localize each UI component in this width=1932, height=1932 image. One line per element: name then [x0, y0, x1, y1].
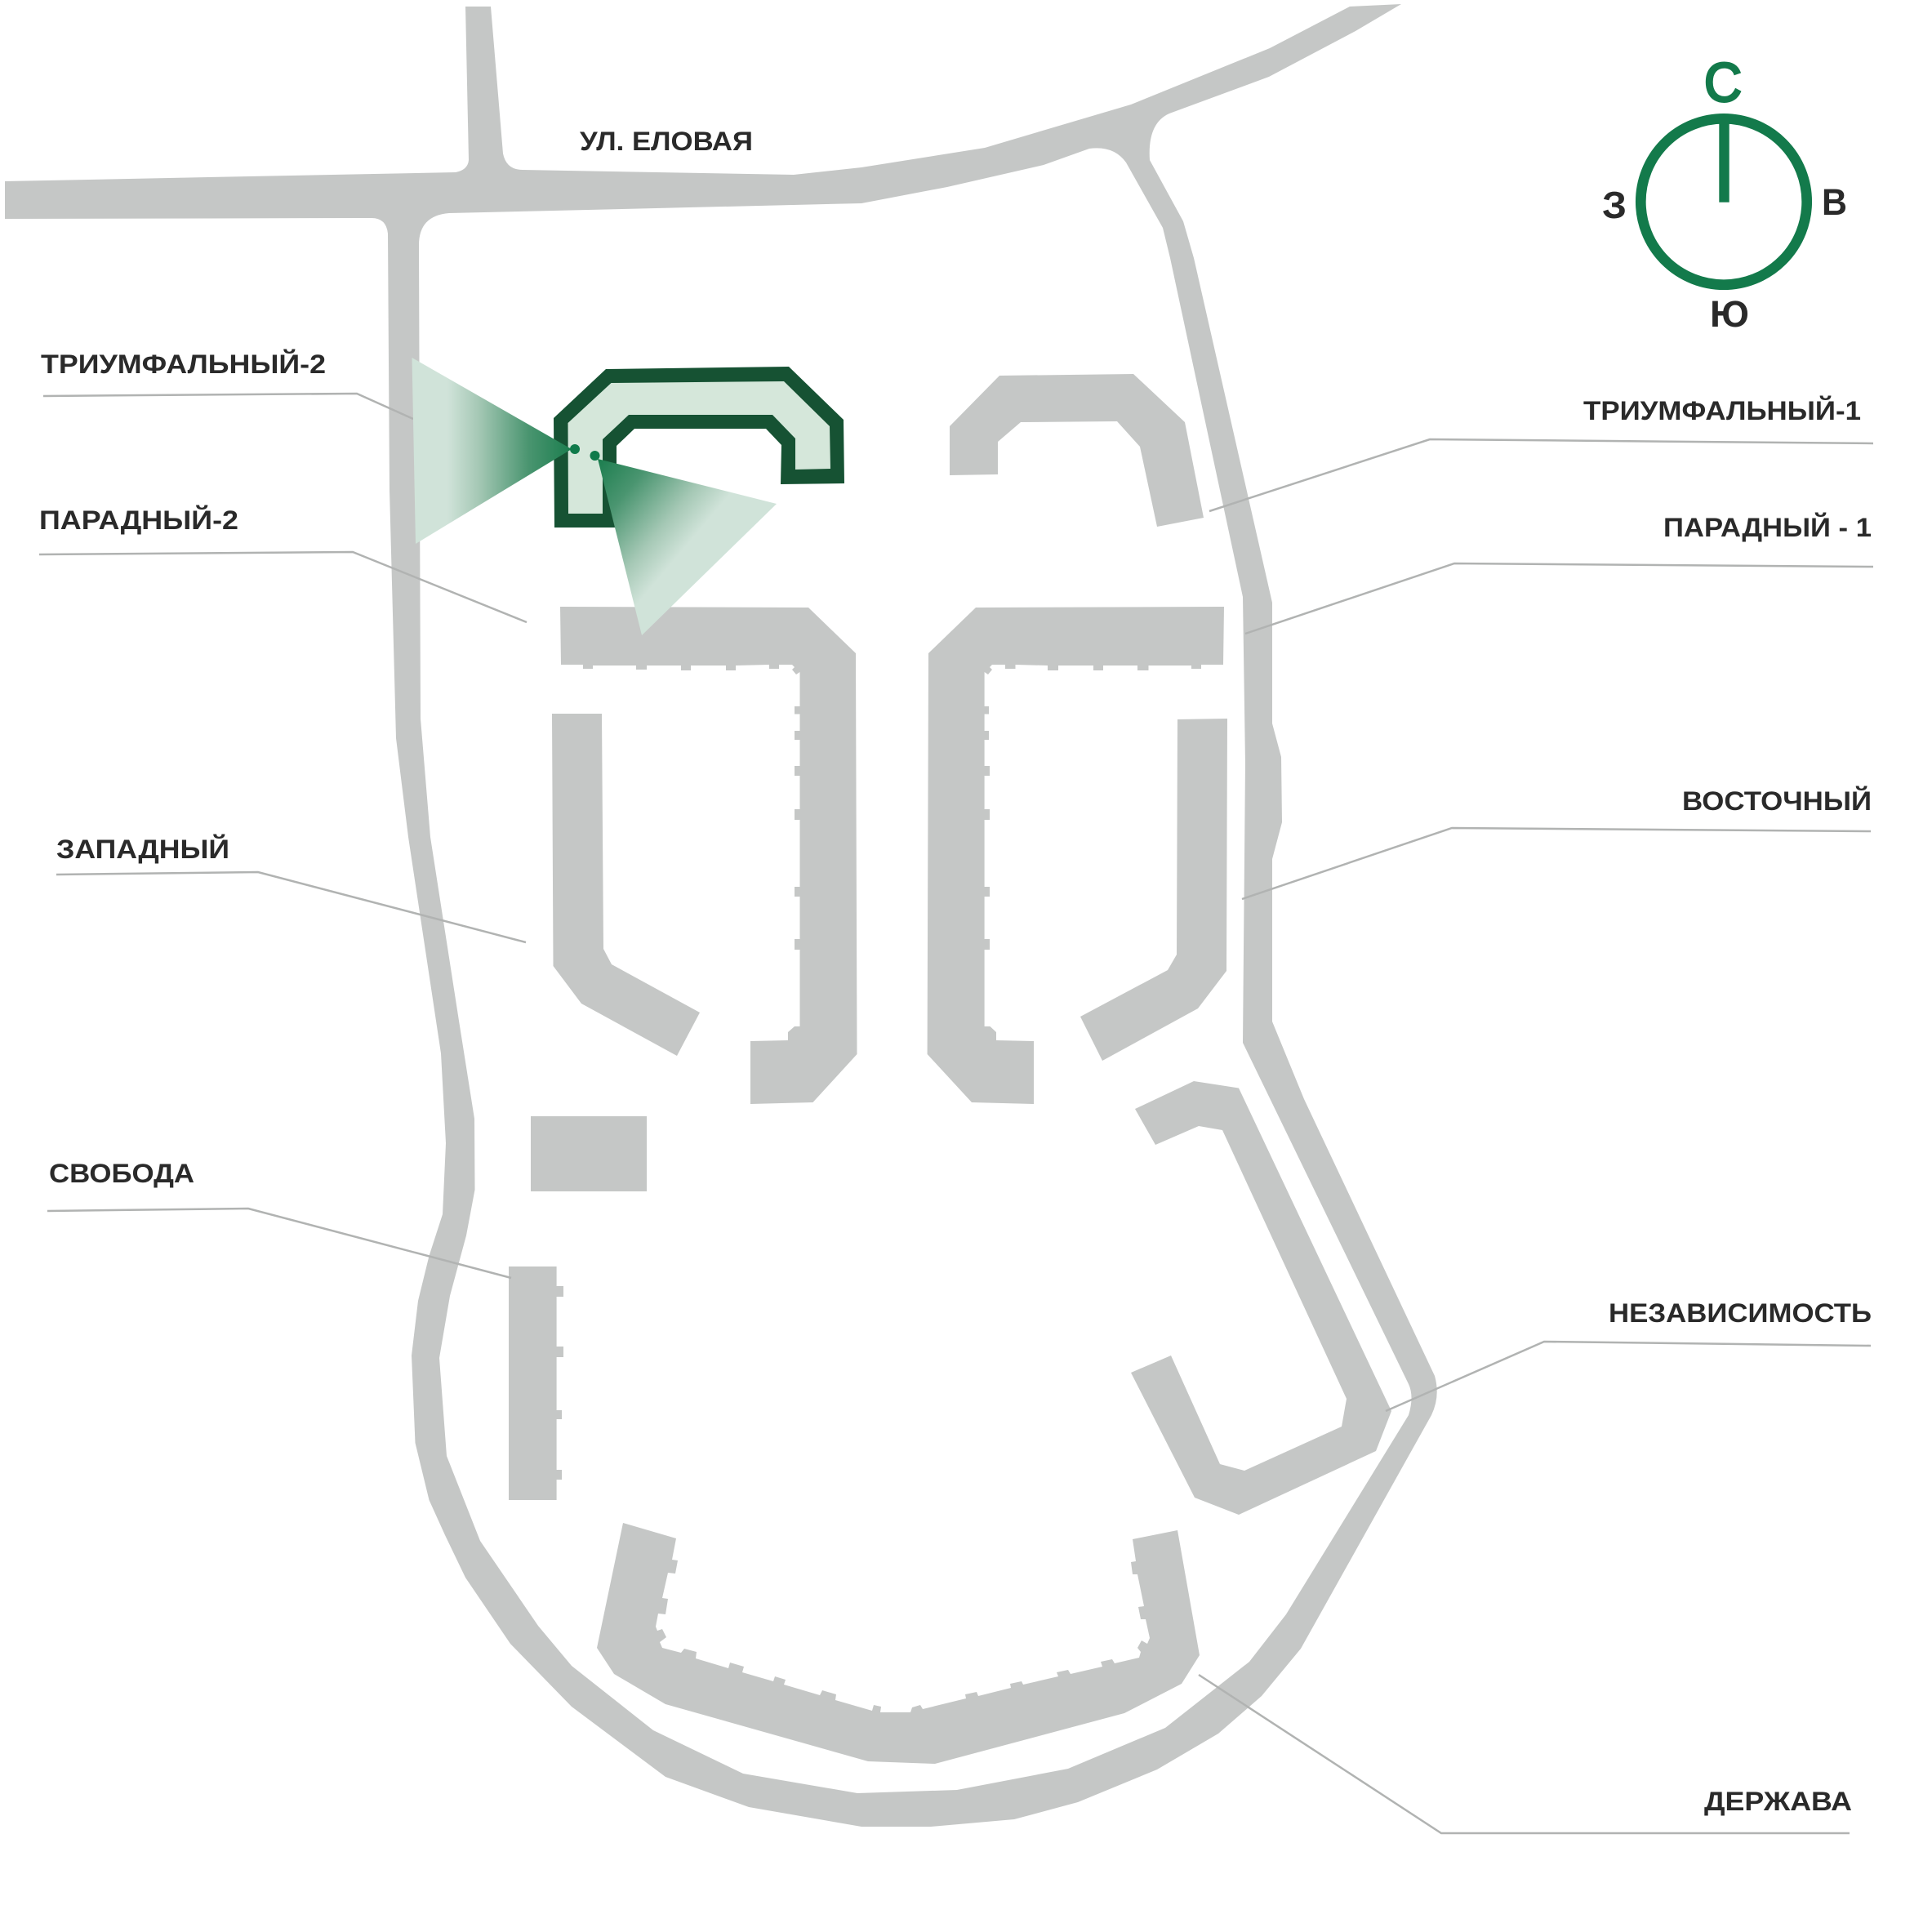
building: Парадный-2	[560, 607, 857, 1104]
callout: Западный: ЗАПАДНЫЙ	[56, 835, 229, 864]
compass	[1602, 52, 1847, 335]
callout: Восточный: ВОСТОЧНЫЙ	[1682, 786, 1872, 816]
north letter: С	[1704, 52, 1742, 114]
building: Свобода	[509, 1266, 563, 1500]
callout: Свобода: СВОБОДА	[49, 1159, 194, 1188]
building: Западный	[552, 714, 700, 1056]
callout: Восточный	[1242, 786, 1872, 899]
callout: Держава	[1199, 1675, 1852, 1833]
callout: Триумфальный-2	[41, 349, 413, 419]
south letter: Ю	[1710, 293, 1749, 335]
viewpoint marker: west	[570, 444, 580, 454]
building: Восточный	[1080, 719, 1227, 1061]
callout: Парадный-2	[39, 505, 527, 622]
west letter: З	[1602, 184, 1627, 226]
building: rectangle block	[531, 1116, 647, 1191]
building: Триумфальный-1	[950, 374, 1204, 527]
callout: Парадный-2: ПАРАДНЫЙ-2	[39, 505, 238, 535]
callout: Держава: ДЕРЖАВА	[1704, 1787, 1852, 1816]
callout: Парадный - 1	[1245, 513, 1873, 634]
building: Независимость	[1131, 1081, 1391, 1515]
callout: Независимость	[1386, 1298, 1872, 1411]
building: Держава	[597, 1523, 1200, 1764]
highlighted building: Триумфальный-2	[554, 367, 844, 528]
road network	[5, 4, 1437, 1827]
callout: Триумфальный-1: ТРИУМФАЛЬНЫЙ-1	[1583, 396, 1861, 425]
east letter: В	[1822, 181, 1847, 223]
road label: ул. Еловая: УЛ. ЕЛОВАЯ	[580, 127, 753, 156]
compass ring	[1640, 118, 1807, 285]
callout: Триумфальный-1	[1209, 396, 1873, 511]
callout: Триумфальный-2: ТРИУМФАЛЬНЫЙ-2	[41, 349, 326, 379]
view cone: south-east	[598, 459, 777, 635]
building: Парадный-1	[928, 607, 1224, 1104]
compass needle	[1719, 114, 1729, 203]
viewpoint marker: south-east	[590, 451, 599, 461]
callout: Свобода	[47, 1159, 511, 1278]
view cone: west	[412, 358, 572, 544]
callout: Независимость: НЕЗАВИСИМОСТЬ	[1609, 1298, 1872, 1328]
callout: Западный	[56, 835, 526, 942]
callout: Парадный - 1: ПАРАДНЫЙ - 1	[1663, 513, 1872, 542]
